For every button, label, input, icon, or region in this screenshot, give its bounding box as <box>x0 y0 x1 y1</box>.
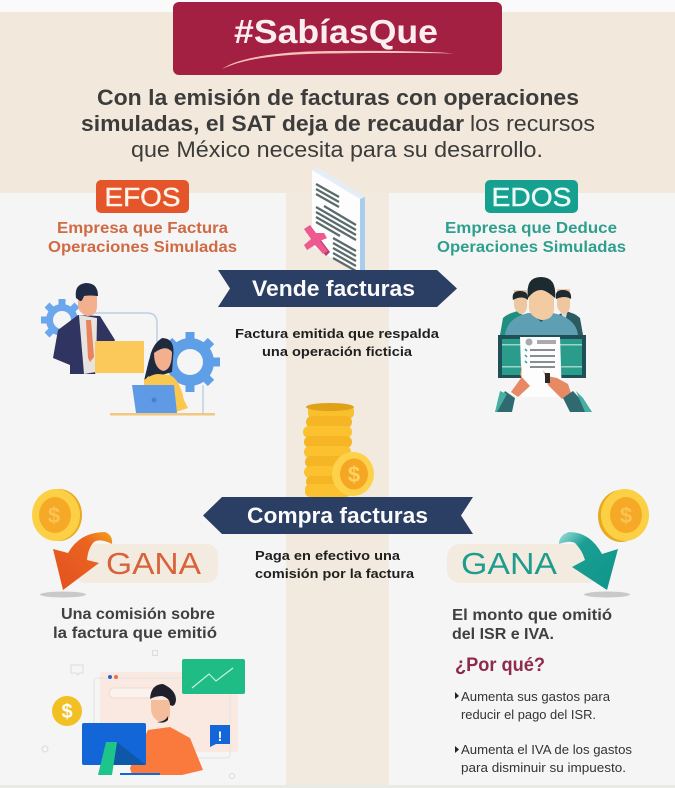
GANA: EFOS <box>40 532 218 598</box>
text: fake invoice description: Factura emitida que respalda <box>235 326 440 341</box>
EFOS subtitle: Empresa que Factura <box>57 220 228 237</box>
person <box>130 684 203 775</box>
icon: orange down arrow <box>53 532 112 590</box>
text: cash commission description <box>255 548 415 581</box>
intro text <box>81 85 595 162</box>
bullet list: para disminuir su impuesto. <box>461 761 626 775</box>
illustration: man at computer with chart <box>42 650 245 778</box>
text: EFOS gain <box>53 606 217 642</box>
icon: coin stack: $ <box>348 462 360 487</box>
text: cash commission description: Paga en efectivo una <box>255 548 401 563</box>
ribbon: Compra facturas: Compra facturas <box>247 503 428 528</box>
ribbon: Compra facturas <box>203 497 473 534</box>
icon: right coin <box>598 489 649 542</box>
title banner: #SabíasQue <box>234 13 438 50</box>
form paper <box>520 337 562 397</box>
text: fake invoice description <box>235 326 440 359</box>
EFOS subtitle <box>48 220 237 256</box>
bullet list <box>455 690 632 775</box>
ribbon: Vende facturas <box>218 270 457 307</box>
panel: EFOS column <box>0 193 286 785</box>
EDOS subtitle: Operaciones Simuladas <box>437 239 626 256</box>
badge: EFOS: EFOS <box>104 182 180 212</box>
text: cash commission description: comisión por la factura <box>255 566 415 581</box>
front man <box>505 277 578 335</box>
woman with laptop <box>132 338 188 413</box>
desk line <box>110 413 215 416</box>
GANA: EFOS: GANA <box>106 546 201 581</box>
alert bubble <box>210 725 230 747</box>
EFOS subtitle: Operaciones Simuladas <box>48 239 237 256</box>
panel: EDOS column <box>389 193 675 785</box>
small outline shapes <box>42 650 234 778</box>
intro text: los recursos <box>470 111 595 136</box>
icon: dollar coin: $ <box>61 701 73 723</box>
bullet list: Aumenta el IVA de los gastos <box>461 743 632 757</box>
icon: left gear <box>41 299 83 341</box>
alert bubble: ! <box>218 728 222 744</box>
title banner <box>173 2 502 75</box>
bottom edge <box>0 785 675 788</box>
monitor <box>82 723 160 775</box>
illustration: EDOS group with document <box>495 277 592 412</box>
text: fake invoice description: una operación ficticia <box>262 344 413 359</box>
GANA: EDOS <box>447 532 630 598</box>
illustration: EFOS workers with gears <box>41 283 220 416</box>
GANA: EDOS: GANA <box>461 546 557 581</box>
intro text: que México necesita para su desarrollo. <box>131 137 543 162</box>
badge: EDOS: EDOS <box>492 182 572 212</box>
man in suit <box>53 283 144 374</box>
intro text: Con la emisión de facturas con operaciones <box>97 85 579 110</box>
back men <box>500 289 583 335</box>
monitor <box>498 335 586 378</box>
chart card <box>182 659 245 694</box>
hands and sleeves <box>495 364 592 412</box>
bullet list: Aumenta sus gastos para <box>461 690 610 704</box>
EDOS subtitle <box>437 220 626 256</box>
icon: coin stack <box>303 403 374 497</box>
bullet list: reducir el pago del ISR. <box>461 708 596 722</box>
text: EFOS gain: Una comisión sobre <box>61 606 215 623</box>
icon: right gear <box>160 332 220 392</box>
icon: left coin <box>32 489 82 541</box>
text: EDOS gain <box>452 607 612 643</box>
text: EFOS gain: la factura que emitió <box>53 625 217 642</box>
badge: EFOS <box>96 180 189 213</box>
icon: right coin: $ <box>620 503 632 528</box>
ribbon: Vende facturas: Vende facturas <box>252 276 415 301</box>
text: EDOS gain: del ISR e IVA. <box>452 626 554 643</box>
heading: Por qué: ¿Por qué? <box>455 655 545 676</box>
icon: left coin: $ <box>48 503 60 528</box>
intro text: simuladas, el SAT deja de recaudar <box>81 111 464 136</box>
icon: dollar coin <box>52 696 82 726</box>
EDOS subtitle: Empresa que Deduce <box>445 220 617 237</box>
icon: teal down arrow <box>559 532 618 590</box>
icon: invoice document with pink cross <box>304 168 365 275</box>
text: EDOS gain: El monto que omitió <box>452 607 612 624</box>
